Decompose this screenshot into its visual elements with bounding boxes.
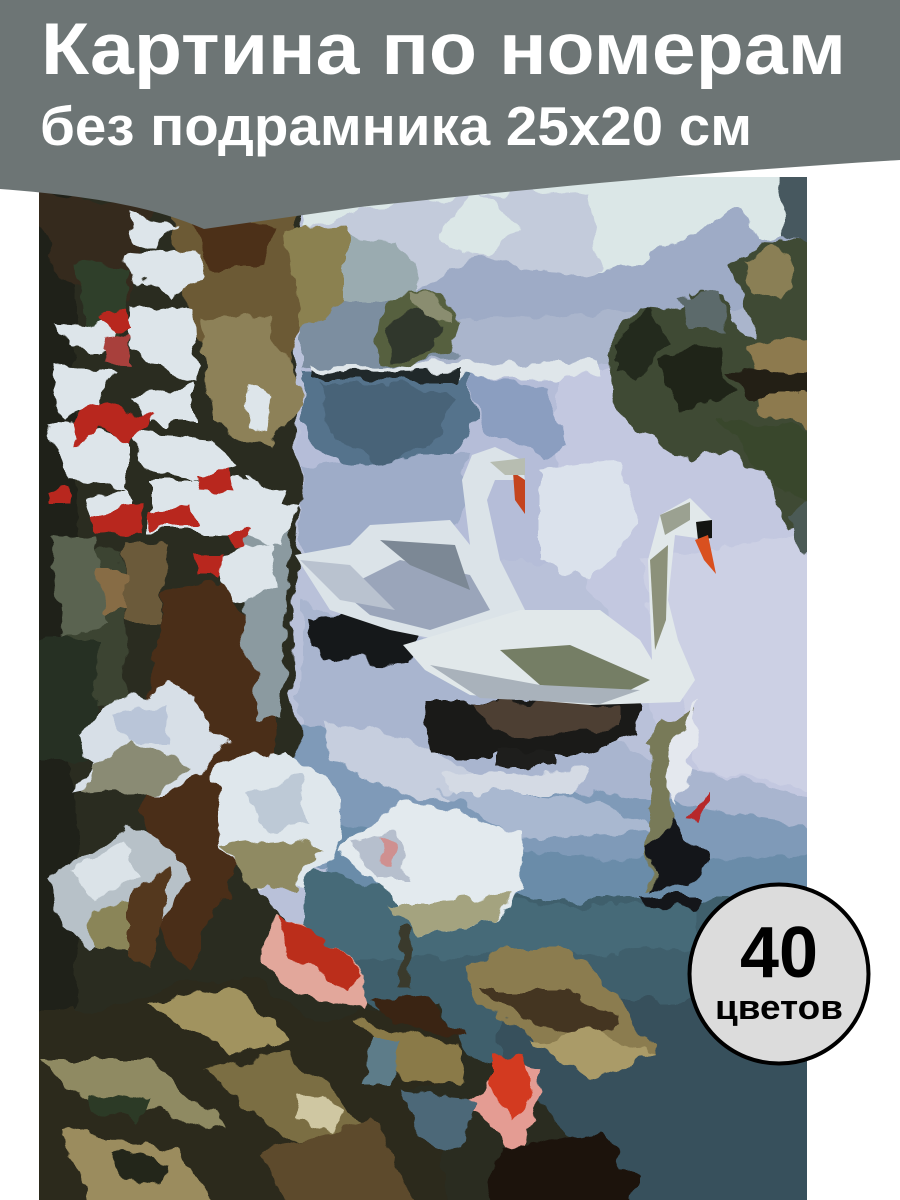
back swan [295, 447, 525, 640]
front swan [403, 498, 716, 705]
leaves lower left and rocks [0, 950, 655, 1200]
banner [0, 0, 900, 229]
stems and reeds [20, 535, 412, 990]
pink and red buds [262, 920, 545, 1150]
painting: swans on a lake [39, 177, 807, 1200]
left dark bank [39, 192, 570, 1200]
badge: 40 colours [690, 884, 868, 1064]
swans dark reflections [305, 610, 640, 755]
far shore clouds and reflections [300, 195, 640, 580]
red poppies upper left [43, 307, 255, 575]
badge: 40 colours: 40 [740, 913, 818, 993]
white blossoms and foliage upper left [50, 218, 300, 600]
swan reflection [445, 700, 710, 908]
sky and water base [293, 177, 807, 1200]
badge: 40 colours: цветов [715, 989, 843, 1027]
subtitle: без подрамника 25х20 см [40, 95, 752, 157]
island centre [375, 288, 462, 366]
trees right [608, 177, 807, 556]
title: Картина по номерам [41, 9, 846, 90]
white water lilies [48, 680, 522, 970]
